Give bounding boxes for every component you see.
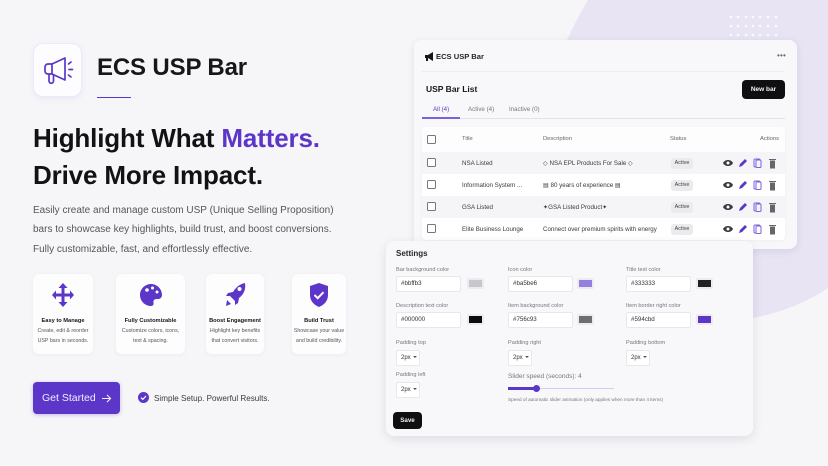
table row: NSA Listed — [422, 152, 785, 174]
table row: Information System: Active — [675, 182, 689, 188]
dot grid — [730, 16, 778, 36]
more dots: ••• — [777, 51, 786, 60]
table header: Title — [462, 136, 473, 142]
field: item border right color: Item border right color — [626, 302, 681, 308]
slider — [508, 385, 614, 392]
panel: settings: #333333 — [631, 280, 655, 287]
field: padding right: Padding right — [508, 340, 541, 346]
table header: Description — [543, 136, 572, 142]
table header: Status — [670, 136, 686, 142]
table row: GSA Listed: ✦GSA Listed Product✦ — [543, 204, 607, 210]
action icons — [723, 202, 776, 212]
table row: NSA Listed: NSA Listed — [462, 160, 493, 166]
table row: GSA Listed: Active — [675, 204, 689, 210]
field: icon color: Icon color — [508, 266, 532, 272]
field: bar background color: Bar background color — [396, 266, 449, 272]
panel: feature boost engagement — [206, 274, 264, 354]
panel: feature build trust — [292, 274, 346, 354]
icon: palette — [140, 284, 162, 306]
panel: feature easy to manage: USP bars in seconds. — [38, 338, 88, 344]
panel: settings: 2px — [513, 354, 523, 360]
headline: Drive More Impact. — [33, 160, 263, 190]
panel: settings: #756c93 — [513, 316, 537, 323]
table row: Elite Business Lounge — [422, 218, 785, 240]
action icons — [723, 180, 776, 190]
panel: feature build trust: Build Trust — [304, 318, 334, 324]
panel: feature fully customizable — [116, 274, 185, 354]
description text: Easily create and manage custom USP (Unique Selling Proposition) — [33, 204, 334, 216]
panel: settings: 2px — [401, 386, 411, 392]
table header: Actions — [760, 136, 779, 142]
action icons — [723, 224, 776, 234]
table row: Information System: Information System ... — [462, 182, 522, 188]
panel: settings: #bbffb3 — [401, 280, 422, 287]
get started button: Get Started — [42, 392, 96, 404]
panel: settings: #ba5be6 — [513, 280, 537, 287]
table row: Elite Business Lounge: Active — [675, 226, 689, 232]
table row: Information System — [422, 174, 785, 196]
title underline — [97, 96, 131, 98]
panel: feature easy to manage: Create, edit & reorder — [38, 328, 88, 334]
headline — [33, 123, 320, 190]
field: padding left: Padding left — [396, 372, 426, 378]
panel: feature easy to manage — [33, 274, 93, 354]
field: description text color: Description text color — [396, 302, 448, 308]
table row: Elite Business Lounge: Elite Business Lounge — [462, 226, 523, 232]
panel: feature build trust: and build credibility. — [296, 338, 342, 344]
get started button — [33, 382, 120, 414]
panel: feature boost engagement: Highlight key benefits — [210, 328, 260, 334]
panel: settings — [386, 241, 753, 436]
panel: feature fully customizable: Fully Customizable — [125, 318, 176, 324]
panel: settings: 2px — [631, 354, 641, 360]
panel: feature boost engagement: that convert visitors. — [211, 338, 259, 344]
new bar button — [742, 80, 785, 99]
table row: NSA Listed: ◇ NSA EPL Products For Sale ◇ — [543, 160, 633, 166]
panel: USP bar list — [414, 40, 797, 249]
field: padding top: Padding top — [396, 340, 426, 346]
panel: feature fully customizable: text & spacing. — [133, 338, 168, 344]
icon: megaphone logo tile — [33, 43, 82, 97]
field: padding bottom: Padding bottom — [626, 340, 665, 346]
description text: Fully customizable, fast, and effortlessly effective. — [33, 244, 252, 255]
panel: feature fully customizable: Customize colors, icons, — [122, 328, 179, 334]
table row: NSA Listed: Active — [675, 160, 689, 166]
icon: arrow right — [102, 394, 112, 402]
panel: feature build trust: Showcase your value — [294, 328, 344, 334]
table row: GSA Listed: GSA Listed — [462, 204, 493, 210]
new bar button: New bar — [751, 86, 776, 93]
icon: check circle — [138, 392, 149, 403]
tabs — [422, 102, 785, 119]
tabs: Active (4) — [468, 106, 494, 112]
action icons — [723, 158, 776, 168]
icon: small megaphone — [425, 52, 433, 61]
icon: shield check — [310, 283, 328, 307]
panel: settings: #000000 — [401, 316, 425, 323]
panel: settings: 2px — [401, 354, 411, 360]
panel: settings: #594cbd — [631, 316, 655, 323]
panel title: ECS USP Bar — [436, 52, 484, 61]
tabs: All (4) — [433, 106, 449, 112]
slider help text: Speed of automatic slider animation (only applies when more than 4 items) — [508, 396, 663, 402]
field: item background color: Item background color — [508, 302, 563, 308]
panel: feature easy to manage: Easy to Manage — [42, 318, 84, 324]
table row: GSA Listed — [422, 196, 785, 218]
tagline: Simple Setup. Powerful Results. — [154, 394, 270, 402]
description text: bars to showcase key highlights, build trust, and boost conversions. — [33, 224, 332, 235]
table row: Elite Business Lounge: Connect over premium spirits with energy — [543, 226, 657, 232]
panel: feature boost engagement: Boost Engagement — [209, 318, 261, 324]
description text — [33, 204, 334, 255]
field: title text color: Title text color — [626, 266, 661, 272]
tabs: Inactive (0) — [509, 106, 540, 112]
icon: move arrows — [52, 283, 74, 307]
settings heading: Settings — [396, 249, 428, 258]
save button — [393, 412, 422, 429]
table — [422, 127, 785, 240]
title: ECS USP Bar — [97, 54, 247, 81]
table header — [427, 135, 779, 144]
list heading: USP Bar List — [426, 84, 477, 94]
icon: rocket — [226, 283, 246, 306]
headline: Highlight What Matters. — [33, 123, 320, 153]
table row: Information System: ▤ 80 years of experience ▤ — [543, 182, 621, 188]
slider label: Slider speed (seconds): 4 — [508, 372, 582, 380]
save button: Save — [400, 417, 415, 424]
